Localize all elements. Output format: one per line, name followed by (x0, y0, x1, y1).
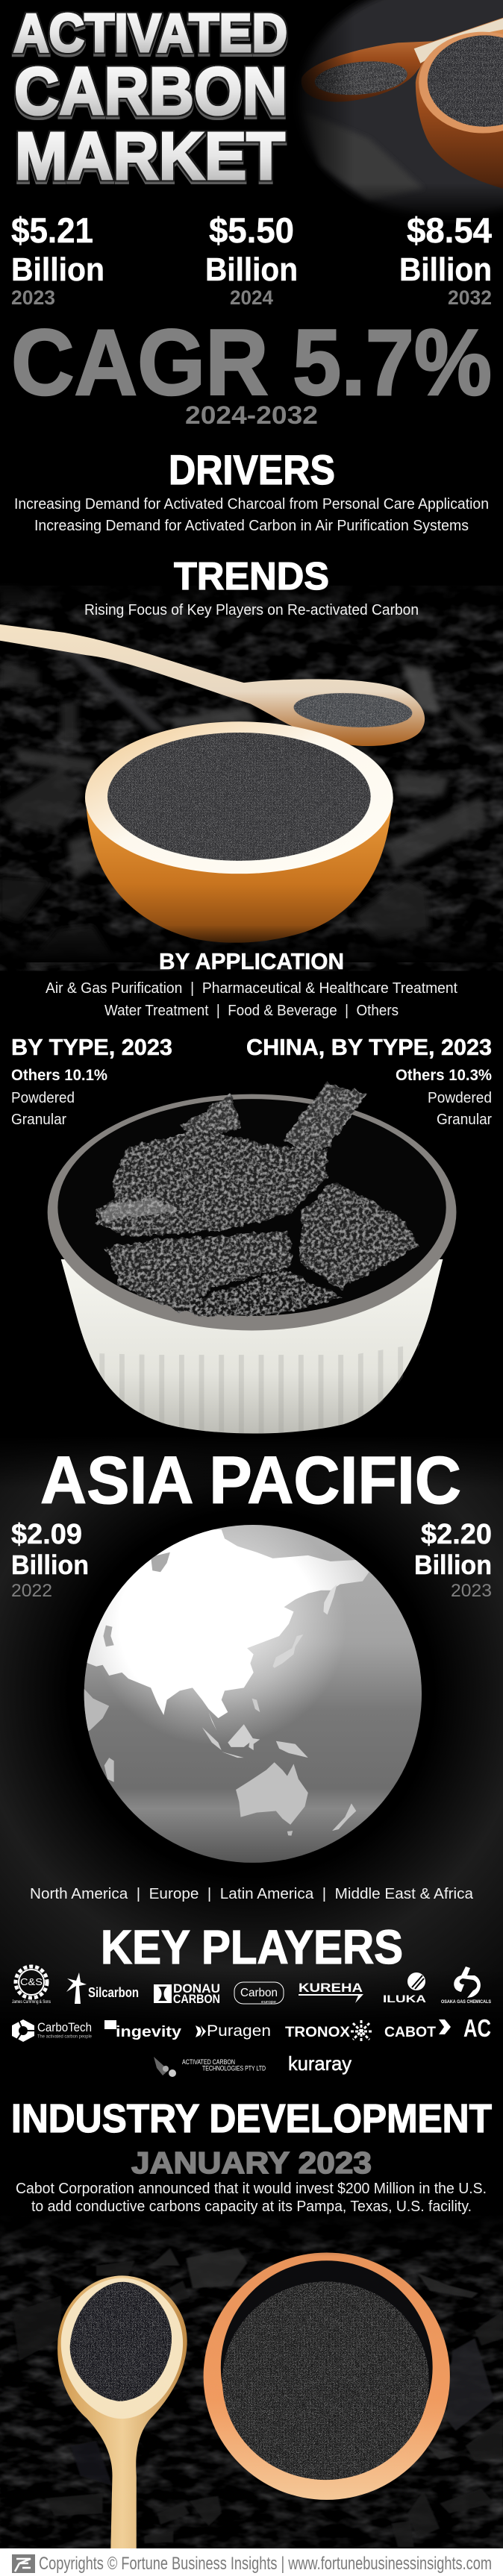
fade bottom of photo (0, 925, 503, 962)
trends text: Rising Focus of Key Players on Re-activated Carbon (84, 601, 419, 618)
development date: JANUARY 2023 (131, 2146, 372, 2180)
logo: Carbon Activated Europe: europe (261, 2000, 276, 2005)
title: MARKET (15, 119, 285, 194)
glow top fade (0, 1436, 503, 1488)
application list (46, 980, 457, 1019)
logo: James Cumming and Sons (12, 1967, 51, 2005)
wooden spoon (0, 624, 425, 746)
stat: 2032 market size: $8.54 (407, 210, 492, 250)
photo bottom fade (287, 183, 503, 220)
logo: Carbon Activated Europe (234, 1982, 284, 2005)
logo: Osaka Gas Chemicals (441, 1967, 492, 2005)
title (13, 4, 287, 194)
stat: 2024 market size (205, 210, 298, 309)
logo: Ingevity: ingevity (116, 2024, 182, 2040)
logo: James Cumming and Sons: C&S (20, 1976, 43, 1987)
logo: Puragen: Puragen (207, 2022, 271, 2040)
stat: 2023 market size (11, 210, 104, 309)
heading: by application: BY APPLICATION (159, 948, 344, 974)
stat: 2032 market size: Billion (399, 251, 492, 288)
icon: Fortune Business Insights logo (12, 2554, 35, 2573)
stat: 2024 market size: $5.50 (209, 210, 294, 250)
heading: key players: KEY PLAYERS (101, 1920, 403, 1974)
stat: 2032 market size (399, 210, 492, 309)
globe (64, 1508, 422, 1863)
logo row 3 (154, 2052, 352, 2077)
stat: 2024 market size: Billion (205, 251, 298, 288)
stat: 2032 market size: 2032 (448, 286, 492, 309)
mottled charcoal texture (0, 586, 503, 971)
logo: Kureha: KUREHA (299, 1981, 363, 1995)
application list: Water Treatment | Food & Beverage | Others (104, 1002, 399, 1019)
logo: CarboTech: CarboTech (37, 2020, 92, 2034)
glow bottom fade (0, 1969, 503, 2026)
CAGR period: 2024-2032 (185, 401, 318, 430)
drivers list: Increasing Demand for Activated Charcoal from Personal Care Application (14, 495, 489, 513)
fade under heading trends (0, 574, 503, 619)
title: CARBON (14, 54, 287, 129)
stat: 2023 market size: $5.21 (11, 210, 93, 250)
logo: Cabot (384, 2019, 451, 2040)
asia pacific background glow (0, 1436, 503, 2025)
wooden bowl (85, 721, 393, 943)
stat: 2024 market size: 2024 (230, 286, 273, 309)
stat: 2022 region (11, 1519, 89, 1601)
logo: Carbon Activated Europe: Carbon (240, 1987, 278, 1999)
photo: wooden spoon and bowl of carbon powder (299, 0, 503, 218)
development description: Cabot Corporation announced that it would invest $200 Million in the U.S. (16, 2180, 487, 2197)
logo: Tronox: TRONOX (285, 2025, 350, 2040)
type legend left: Powdered (11, 1089, 75, 1106)
heading: drivers: DRIVERS (169, 446, 335, 493)
type legend left (11, 1067, 107, 1128)
logo: Iluka (383, 1972, 426, 2005)
charcoal background (13, 2248, 503, 2547)
logo: James Cumming and Sons: James Cumming & Sons (12, 1999, 51, 2005)
logo: Donau Carbon: DONAU (173, 1981, 220, 1996)
photo fade to black (287, 0, 354, 224)
ramekin of charcoal (48, 1082, 456, 1434)
logo: CarboTech: The activated carbon people (37, 2034, 92, 2040)
logo row 1 (12, 1967, 492, 2006)
photo: spoon and oval bowl of carbon powder (0, 2216, 503, 2548)
logo: Osaka Gas Chemicals: OSAKA GAS CHEMICALS (441, 1999, 492, 2005)
stat: 2023 region: Billion (414, 1549, 492, 1580)
stat: 2022 region: 2022 (11, 1581, 52, 1601)
heading: china by type: CHINA, BY TYPE, 2023 (246, 1034, 492, 1060)
stat: 2022 region: $2.09 (11, 1519, 82, 1550)
application list: Air & Gas Purification | Pharmaceutical & Healthcare Treatment (46, 980, 457, 997)
charcoal background (0, 586, 488, 968)
title: ACTIVATED (13, 4, 287, 63)
development description: to add conductive carbons capacity at its Pampa, Texas, U.S. facility. (31, 2198, 472, 2215)
logo: AC: AC (463, 2014, 491, 2042)
stat: 2023 market size: 2023 (11, 286, 55, 309)
logo: Silcarbon (66, 1972, 139, 2004)
heading: trends: TRENDS (174, 555, 329, 598)
stat: 2023 region: 2023 (451, 1581, 492, 1601)
other regions list: North America | Europe | Latin America | Middle East & Africa (30, 1885, 474, 1902)
type legend left: Granular (11, 1111, 66, 1128)
mottled charcoal texture (0, 2216, 503, 2548)
logo: Activated Carbon Technologies (154, 2057, 266, 2077)
heading: by type: BY TYPE, 2023 (11, 1034, 172, 1060)
drivers list: Increasing Demand for Activated Carbon in Air Purification Systems (34, 517, 469, 534)
stat: 2023 region: $2.20 (421, 1519, 492, 1550)
logo: Cabot: CABOT (384, 2025, 436, 2040)
type legend left: Others 10.1% (11, 1067, 107, 1084)
ramekin rim (48, 1094, 456, 1330)
stat: 2022 region: Billion (11, 1549, 89, 1580)
logo: Kureha (299, 1981, 363, 2003)
stat: 2023 market size: Billion (11, 251, 104, 288)
logo: Donau Carbon: CARBON (173, 1992, 220, 2006)
logo: Kuraray: kuraray (288, 2052, 352, 2075)
wooden spoon (57, 2275, 187, 2548)
logo: Activated Carbon Technologies: ACTIVATED CARBON (182, 2058, 235, 2066)
logo: Ingevity (104, 2020, 182, 2040)
oval terracotta bowl (204, 2252, 450, 2500)
type legend right: Others 10.3% (396, 1067, 492, 1084)
drivers list (14, 495, 489, 534)
charcoal chunks (96, 1082, 419, 1316)
logo: Tronox (285, 2020, 372, 2043)
logo: Activated Carbon Technologies: TECHNOLOGIES PTY LTD (202, 2065, 266, 2072)
stat: 2023 region (414, 1519, 492, 1601)
logo: Donau Carbon (154, 1981, 220, 2006)
type legend right (396, 1067, 492, 1128)
fade top of photo (0, 2212, 503, 2257)
logo: CarboTech (12, 2019, 92, 2042)
footer (0, 2548, 503, 2576)
ramekin body (61, 1259, 443, 1434)
photo: bowl and spoon on charcoal (0, 586, 503, 971)
logo: Iluka: ILUKA (383, 1993, 426, 2005)
logo: Silcarbon: Silcarbon (88, 1985, 139, 2000)
type legend right: Powdered (428, 1089, 492, 1106)
logo row 2 (12, 2014, 491, 2043)
development description (16, 2180, 487, 2215)
heading: asia pacific: ASIA PACIFIC (40, 1444, 461, 1518)
type legend right: Granular (437, 1111, 492, 1128)
